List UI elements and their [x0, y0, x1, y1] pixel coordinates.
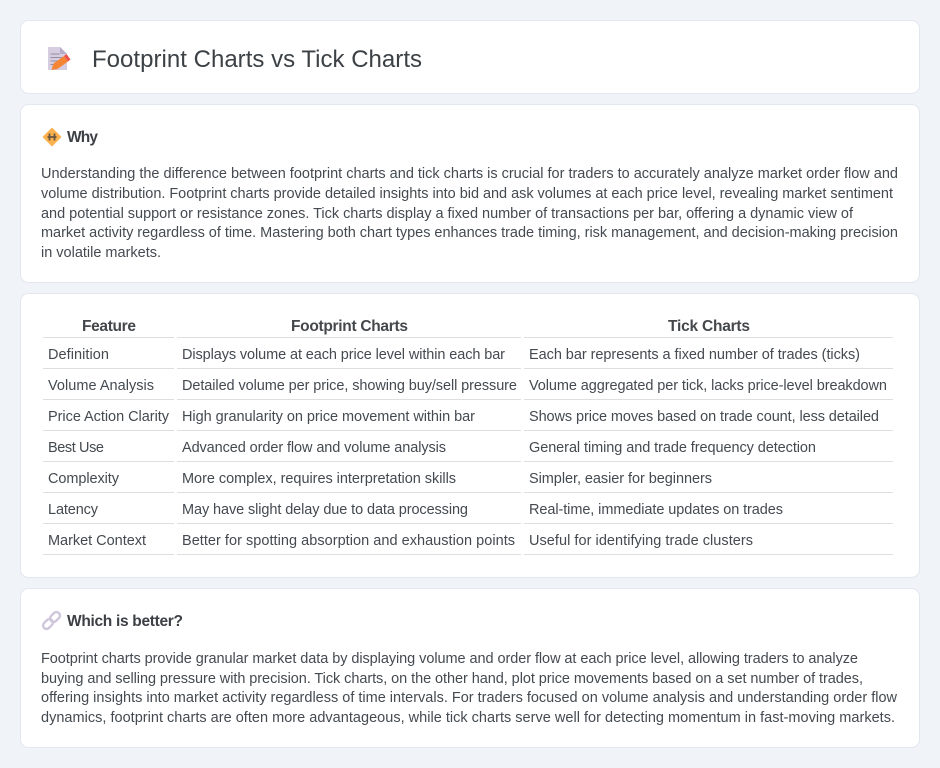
row: best use [48, 440, 816, 456]
panel: which is better [20, 588, 920, 748]
table header: Footprint Charts [291, 318, 408, 335]
text block: which paragraph [41, 651, 898, 726]
row: complexity: More complex, requires interpretation skills [182, 471, 456, 487]
row: volume analysis: Volume Analysis [48, 378, 154, 394]
row: best use: Advanced order flow and volume analysis [182, 440, 446, 456]
icon: memo with pencil [48, 47, 70, 70]
title: Footprint Charts vs Tick Charts [92, 46, 422, 73]
panel: why [20, 104, 920, 282]
panel: title header [20, 20, 920, 94]
text block: why paragraph [41, 166, 898, 261]
row: price action clarity: High granularity on price movement within bar [182, 409, 475, 425]
text block: which paragraph: Footprint charts provide granular market data by displaying volume and order flow at each price level, allowing traders to analyze [41, 651, 858, 667]
row: latency: Latency [48, 502, 99, 518]
heading: which is better: Which is better? [67, 613, 183, 630]
row: definition [48, 347, 860, 363]
row: definition: Definition [48, 347, 109, 363]
row: complexity: Simpler, easier for beginners [529, 471, 712, 487]
row: latency: May have slight delay due to data processing [182, 502, 468, 518]
row: market context [48, 533, 753, 549]
text block: which paragraph: offering insights into market activity regardless of time intervals. For traders focused on volume analysis and understanding order flow [41, 690, 898, 706]
row: volume analysis: Volume aggregated per tick, lacks price-level breakdown [529, 378, 887, 394]
row: market context: Market Context [48, 533, 146, 549]
row: latency: Real-time, immediate updates on trades [529, 502, 783, 518]
text block: why paragraph: Understanding the difference between footprint charts and tick charts is crucial for traders to accurately analyze market order flow and [41, 166, 898, 182]
row: complexity: Complexity [48, 471, 120, 487]
table header [82, 318, 750, 335]
row: volume analysis: Detailed volume per price, showing buy/sell pressure [182, 378, 517, 394]
icon: link [42, 611, 61, 630]
text block: which paragraph: buying and selling pressure with precision. Tick charts, on the other hand, plot price movements based on a set number of trades, [41, 671, 863, 687]
row: definition: Displays volume at each price level within each bar [182, 347, 505, 363]
text block: why paragraph: in volatile markets. [41, 245, 161, 261]
row: market context: Useful for identifying trade clusters [529, 533, 753, 549]
row: price action clarity: Shows price moves based on trade count, less detailed [529, 409, 879, 425]
table header: Tick Charts [668, 318, 750, 335]
row: latency [48, 502, 783, 518]
panel: comparison table [20, 294, 920, 578]
heading: why: Why [67, 129, 98, 146]
row: best use: General timing and trade frequency detection [529, 440, 816, 456]
icon: warning diamond [44, 128, 60, 146]
row: price action clarity: Price Action Clarity [48, 409, 170, 425]
row: best use: Best Use [48, 440, 104, 456]
row: volume analysis [48, 378, 887, 394]
text block: why paragraph: volume distribution. Footprint charts provide detailed insights into bid and ask volumes at each price level, revealing market sentiment [41, 186, 893, 202]
row: price action clarity [48, 409, 879, 425]
row: definition: Each bar represents a fixed number of trades (ticks) [529, 347, 860, 363]
text block: why paragraph: market activity regardless of time. Mastering both chart types enhances trade timing, risk management, and decision-making precision [41, 225, 898, 241]
text block: why paragraph: and potential support or resistance zones. Tick charts display a fixed number of transactions per bar, offering a dynamic view of [41, 206, 854, 222]
text block: which paragraph: dynamics, footprint charts are often more advantageous, while tick charts serve well for detecting momentum in fast-moving markets. [41, 710, 895, 726]
row: market context: Better for spotting absorption and exhaustion points [182, 533, 515, 549]
table header: Feature [82, 318, 136, 335]
row: complexity [48, 471, 712, 487]
